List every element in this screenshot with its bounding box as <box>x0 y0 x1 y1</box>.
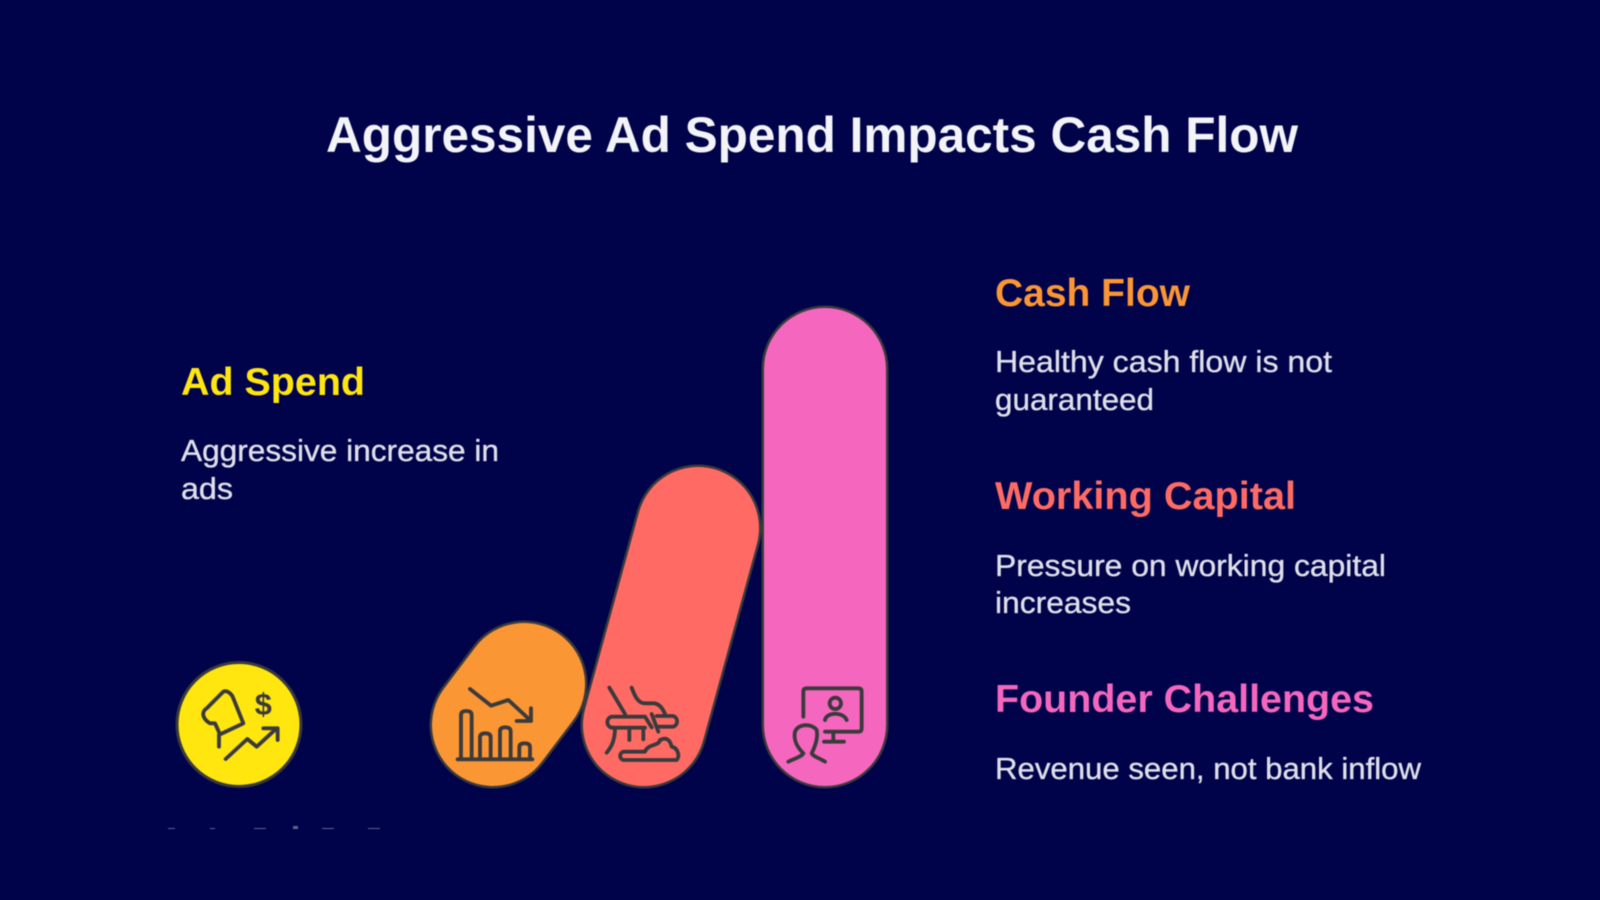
icon: person and video screen <box>788 688 862 762</box>
text: ad spend description: Aggressive increase in <box>181 433 499 468</box>
text: working capital description <box>995 548 1386 620</box>
panel: working capital text <box>995 475 1386 620</box>
bar: founder challenges capsule <box>762 369 888 725</box>
text: ad spend description <box>181 433 499 506</box>
heading: ad spend: Ad Spend <box>181 361 365 404</box>
panel: cash flow text <box>995 272 1332 417</box>
icon: megaphone, dollar and rising arrow: $ <box>255 688 272 722</box>
heading: working capital: Working Capital <box>995 475 1296 518</box>
panel: founder challenges text <box>995 678 1422 786</box>
text: working capital description: Pressure on working capital <box>995 548 1386 583</box>
bar: cash flow capsule <box>493 684 524 725</box>
bar: ad spend circle <box>177 662 301 786</box>
title: Aggressive Ad Spend Impacts Cash Flow <box>326 107 1298 163</box>
icon: megaphone, dollar and rising arrow <box>203 688 278 759</box>
text: working capital description: increases <box>995 585 1131 620</box>
text: cash flow description: guaranteed <box>995 382 1154 417</box>
panel: ad spend text <box>181 361 499 506</box>
heading: cash flow: Cash Flow <box>995 272 1191 315</box>
text: founder challenges description: Revenue seen, not bank inflow <box>995 751 1422 786</box>
chart: rising capsule bars <box>177 369 862 786</box>
icon: hands pressing a basket <box>607 688 678 760</box>
text: ad spend description: ads <box>181 471 233 506</box>
icon: falling trend over bar chart <box>458 689 532 759</box>
text: cash flow description: Healthy cash flow is not <box>995 344 1332 379</box>
heading: founder challenges: Founder Challenges <box>995 678 1374 721</box>
bar: working capital capsule <box>644 528 698 725</box>
clipped footnote remnants <box>168 826 380 829</box>
text: cash flow description <box>995 344 1332 417</box>
